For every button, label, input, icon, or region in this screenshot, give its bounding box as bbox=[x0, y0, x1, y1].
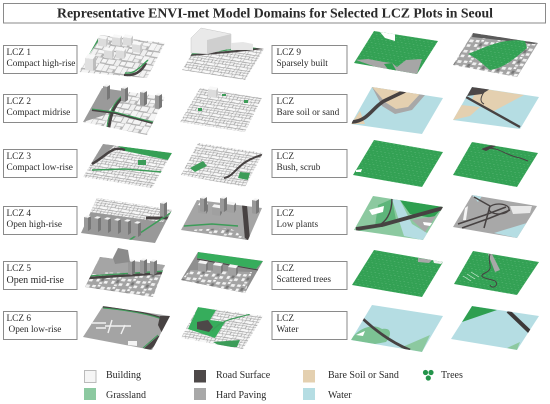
plot: LCZ 3 domain A bbox=[83, 144, 172, 188]
label: water: LCZ bbox=[276, 314, 294, 324]
label: bush, scrub: LCZ bbox=[276, 152, 294, 162]
label: bush, scrub bbox=[272, 150, 347, 178]
label: scattered trees bbox=[272, 262, 347, 290]
label: LCZ 2: LCZ 2 bbox=[6, 97, 31, 107]
legend bbox=[84, 370, 463, 401]
legend: hard paving: Hard Paving bbox=[216, 390, 266, 401]
plot: LCZ 1 domain B bbox=[182, 28, 264, 80]
legend: hard paving bbox=[194, 388, 266, 401]
legend: bare soil or sand bbox=[303, 370, 399, 382]
plot: bush B bbox=[453, 142, 538, 187]
label: scattered trees: LCZ bbox=[276, 264, 294, 274]
label: LCZ 9: LCZ 9 bbox=[276, 48, 301, 58]
legend: road surface: Road Surface bbox=[216, 370, 271, 381]
plot: LCZ 2 domain A bbox=[83, 84, 165, 135]
plot: water B bbox=[451, 306, 539, 350]
label: low plants bbox=[272, 206, 347, 234]
plot: low plants A bbox=[354, 196, 443, 240]
label: LCZ 4 bbox=[4, 206, 77, 234]
label: LCZ 1: LCZ 1 bbox=[6, 48, 31, 58]
plot: bare soil A bbox=[351, 87, 443, 134]
plot: LCZ 4 domain A bbox=[81, 198, 172, 243]
label: LCZ 4: LCZ 4 bbox=[6, 209, 31, 219]
legend: water: Water bbox=[328, 390, 352, 401]
plot: LCZ 2 domain B bbox=[180, 86, 262, 132]
label: LCZ 5 bbox=[4, 262, 77, 290]
label: low plants: LCZ bbox=[276, 209, 294, 219]
legend: grassland bbox=[84, 388, 146, 401]
label: LCZ 5: LCZ 5 bbox=[6, 264, 31, 274]
legend: building bbox=[84, 370, 141, 382]
plot: LCZ 5 domain B bbox=[181, 252, 263, 293]
big building bbox=[191, 28, 231, 54]
plot: scattered trees A bbox=[352, 250, 443, 297]
plot: LCZ 3 domain B bbox=[181, 143, 263, 187]
plot: low plants B bbox=[453, 195, 537, 238]
legend: water bbox=[303, 388, 352, 401]
plot: LCZ 6 domain B bbox=[181, 307, 263, 349]
label: LCZ 3: Compact low-rise bbox=[6, 163, 73, 173]
label: low plants: Low plants bbox=[276, 220, 318, 230]
legend: trees: Trees bbox=[441, 370, 463, 381]
plot: scattered trees B bbox=[454, 251, 539, 295]
plot: water A bbox=[351, 305, 443, 352]
label: LCZ 5: Open mid-rise bbox=[6, 275, 65, 286]
label: water bbox=[272, 312, 347, 340]
plot: LCZ 9 domain A bbox=[354, 31, 438, 74]
label: LCZ 2 bbox=[4, 94, 77, 122]
legend: trees bbox=[423, 370, 463, 381]
legend: road surface bbox=[194, 370, 271, 382]
plot: LCZ 9 domain B bbox=[453, 33, 538, 77]
label: LCZ 6 bbox=[4, 312, 77, 340]
label: water: Water bbox=[276, 325, 299, 335]
label: LCZ 3 bbox=[4, 150, 77, 178]
label: LCZ 3: LCZ 3 bbox=[6, 152, 31, 162]
legend: building: Building bbox=[106, 370, 141, 381]
label: LCZ 6: LCZ 6 bbox=[6, 314, 31, 324]
label: LCZ 1 bbox=[4, 46, 77, 74]
label: bare soil or sand bbox=[272, 94, 347, 122]
label: LCZ 2: Compact midrise bbox=[6, 108, 70, 118]
plot: LCZ 4 domain B bbox=[181, 196, 262, 240]
label: LCZ 1: Compact high-rise bbox=[6, 59, 75, 69]
label: bare soil or sand: Bare soil or sand bbox=[276, 108, 340, 118]
label: LCZ 9 bbox=[272, 46, 347, 74]
label: LCZ 4: Open high-rise bbox=[6, 220, 62, 230]
plot: LCZ 5 domain A bbox=[85, 248, 165, 297]
label: bare soil or sand: LCZ bbox=[276, 97, 294, 107]
plot: bush A bbox=[353, 140, 443, 187]
title bbox=[4, 4, 546, 23]
title: Representative ENVI-met Model Domains for Selected LCZ Plots in Seoul bbox=[57, 6, 493, 20]
plot: bare soil B bbox=[453, 87, 539, 129]
label: LCZ 6: Open low-rise bbox=[8, 325, 61, 335]
label: LCZ 9: Sparsely built bbox=[276, 59, 328, 69]
plot: LCZ 6 domain A bbox=[83, 306, 170, 350]
label: bush, scrub: Bush, scrub bbox=[276, 163, 321, 173]
legend: bare soil or sand: Bare Soil or Sand bbox=[328, 370, 399, 381]
legend: grassland: Grassland bbox=[106, 390, 146, 401]
plot: LCZ 1 domain A bbox=[79, 34, 165, 78]
label: scattered trees: Scattered trees bbox=[276, 275, 331, 285]
